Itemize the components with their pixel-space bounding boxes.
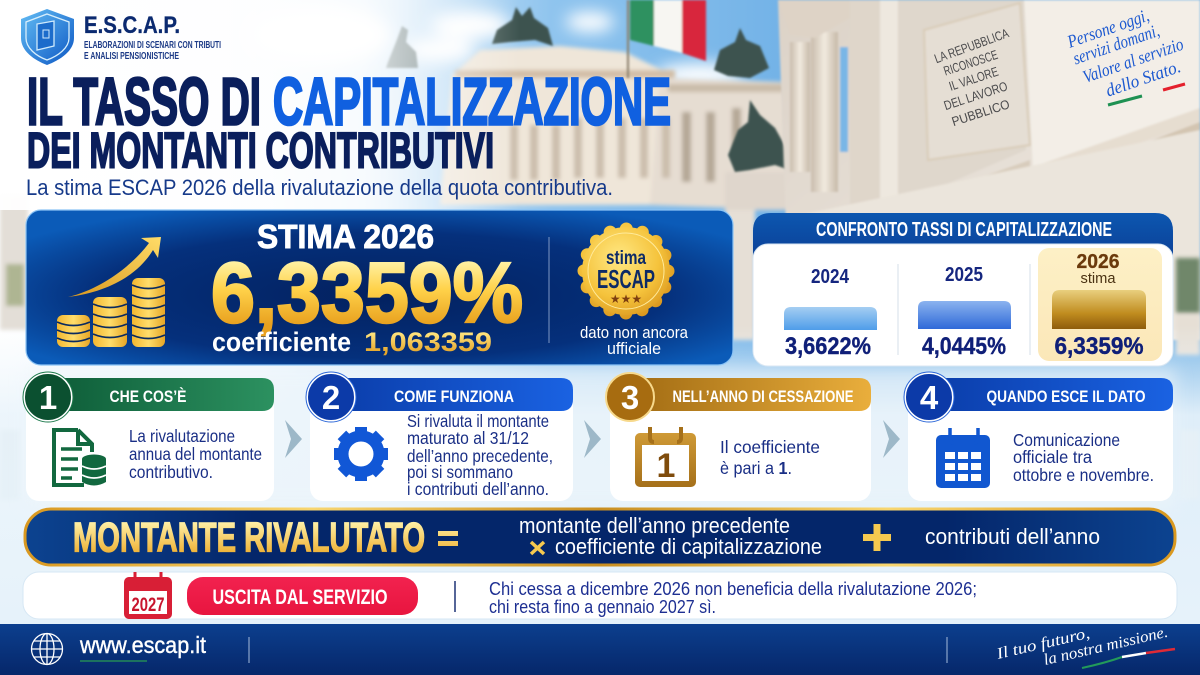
coefficient: [212, 327, 492, 357]
handwritten motto: servizi domani,: [1070, 20, 1162, 68]
inscription on monument: IL VALORE: [947, 64, 1000, 94]
white fade behind heading: [0, 0, 520, 210]
step 1: che cos'è: [23, 372, 274, 501]
badge: stima ESCAP: stima: [606, 248, 646, 269]
column 2026 stima: stima: [1080, 270, 1116, 287]
panel: stima 2026: [26, 210, 733, 365]
handwritten motto: Persone oggi,: [1064, 5, 1151, 52]
badge: stima ESCAP: [582, 227, 670, 315]
icon: calendar 1: [635, 427, 696, 487]
note: ufficiale: [607, 339, 661, 358]
big rate: 6,3359%: [211, 246, 523, 341]
arrow 1: [285, 420, 302, 458]
inscription on monument: PUBBLICO: [950, 96, 1011, 129]
formula bar: [25, 509, 1175, 565]
title: [27, 64, 671, 178]
handwritten motto: dello Stato.: [1103, 56, 1183, 100]
note: [580, 323, 688, 358]
column 2025: 4,0445%: [922, 333, 1006, 360]
step 1: che cos'è: annua del montante: [129, 444, 262, 464]
icon: globe: [32, 634, 62, 664]
step 3: nell'anno di cessazione: [606, 373, 871, 501]
title: DEI MONTANTI CONTRIBUTIVI: [27, 122, 494, 178]
logo: E.S.C.A.P.: E ANALISI PENSIONISTICHE: [84, 50, 179, 62]
step 4: quando esce il dato: QUANDO ESCE IL DATO: [986, 387, 1146, 406]
step 4: quando esce il dato: [904, 372, 1173, 501]
column 2024: [784, 266, 877, 360]
arrow 2: [584, 420, 601, 458]
step 2: come funziona: 2: [322, 379, 340, 416]
step 3: nell'anno di cessazione: Il coefficiente: [720, 437, 820, 457]
inscription on monument: DEL LAVORO: [942, 78, 1009, 113]
step 3: nell'anno di cessazione: 3: [621, 379, 639, 416]
step 2: come funziona: COME FUNZIONA: [394, 387, 514, 406]
step 4: quando esce il dato: 4: [920, 379, 939, 416]
coefficient: 1,063359: [364, 327, 492, 357]
step 4: quando esce il dato: ottobre e novembre.: [1013, 465, 1154, 485]
column 2026 stima: 2026: [1076, 251, 1120, 273]
inscription on monument: LA REPUBBLICA: [932, 25, 1011, 66]
formula bar: montante dell’anno precedente: [519, 513, 790, 538]
step 1: che cos'è: 1: [39, 379, 57, 416]
step 2: come funziona: i contributi dell’anno.: [407, 479, 549, 499]
tagline: Il tuo futuro,: [994, 625, 1091, 663]
step 4: quando esce il dato: Comunicazione: [1013, 430, 1120, 450]
tagline: [994, 624, 1175, 669]
exit notice bar: chi resta fino a gennaio 2027 sì.: [489, 596, 716, 617]
formula bar: contributi dell’anno: [925, 524, 1100, 549]
exit notice bar: USCITA DAL SERVIZIO: [212, 586, 388, 609]
icon: gear: [334, 427, 388, 481]
exit notice bar: Chi cessa a dicembre 2026 non beneficia della rivalutazione 2026;: [489, 578, 977, 599]
icon: calendar 1: 1: [657, 447, 675, 485]
left hazy building and distant trees: [0, 195, 1200, 500]
subtitle: La stima ESCAP 2026 della rivalutazione della quota contributiva.: [26, 175, 613, 200]
icon: calendar grid: [936, 428, 990, 488]
column 2026 stima: [1038, 248, 1162, 361]
footer: [0, 624, 1200, 675]
handwritten motto: [1064, 5, 1186, 105]
exit notice bar: [23, 572, 1177, 619]
column 2024: 2024: [811, 266, 850, 288]
title: CAPITALIZZAZIONE: [273, 64, 671, 140]
step 3: nell'anno di cessazione: NELL’ANNO DI CESSAZIONE: [672, 387, 854, 406]
step 1: che cos'è: CHE COS’È: [110, 387, 186, 406]
formula bar: MONTANTE RIVALUTATO: [73, 514, 425, 560]
panel: confronto tassi: [753, 213, 1173, 366]
step 2: come funziona: maturato al 31/12: [407, 428, 529, 448]
logo: E.S.C.A.P.: [21, 9, 221, 65]
flag: [627, 0, 706, 78]
icon: document with database: [54, 430, 106, 486]
step 2: come funziona: poi si sommano: [407, 462, 513, 482]
inscription on monument: RICONOSCE: [942, 47, 1000, 79]
step 3: nell'anno di cessazione: è pari a 1.: [720, 458, 792, 478]
logo: E.S.C.A.P.: E.S.C.A.P.: [84, 12, 180, 39]
column 2024: 3,6622%: [785, 333, 871, 360]
step 2: come funziona: [306, 372, 573, 501]
tagline: la nostra missione.: [1042, 624, 1170, 669]
step 1: che cos'è: contributivo.: [129, 462, 213, 482]
right marble building: [770, 0, 1200, 340]
badge: stima ESCAP: ESCAP: [597, 264, 655, 294]
step 2: come funziona: Si rivaluta il montante: [407, 411, 549, 431]
column 2025: [918, 264, 1011, 360]
icon: rising coins and arrow: [57, 237, 165, 347]
formula bar: coefficiente di capitalizzazione: [555, 534, 822, 559]
inscription on monument: [932, 25, 1011, 129]
title: IL TASSO DI: [27, 64, 261, 140]
column 2026 stima: 6,3359%: [1054, 333, 1144, 360]
step 1: che cos'è: La rivalutazione: [129, 426, 235, 446]
note: dato non ancora: [580, 323, 688, 342]
column 2025: 2025: [945, 264, 983, 286]
badge: stima ESCAP: ★★★: [610, 292, 642, 306]
panel: stima 2026: STIMA 2026: [257, 218, 434, 255]
statues: [386, 7, 853, 195]
central building: [440, 46, 805, 340]
coefficient: coefficiente: [212, 327, 351, 357]
logo: E.S.C.A.P.: ELABORAZIONI DI SCENARI CON TRIBUTI: [84, 39, 221, 51]
icon: calendar 2027: [124, 572, 172, 619]
icon: shield: [21, 9, 74, 65]
footer: www.escap.it: [79, 632, 207, 658]
step 2: come funziona: dell’anno precedente,: [407, 446, 553, 466]
icon: calendar 2027: 2027: [132, 595, 164, 616]
arrow 3: [883, 420, 900, 458]
step 4: quando esce il dato: officiale tra: [1013, 447, 1092, 467]
